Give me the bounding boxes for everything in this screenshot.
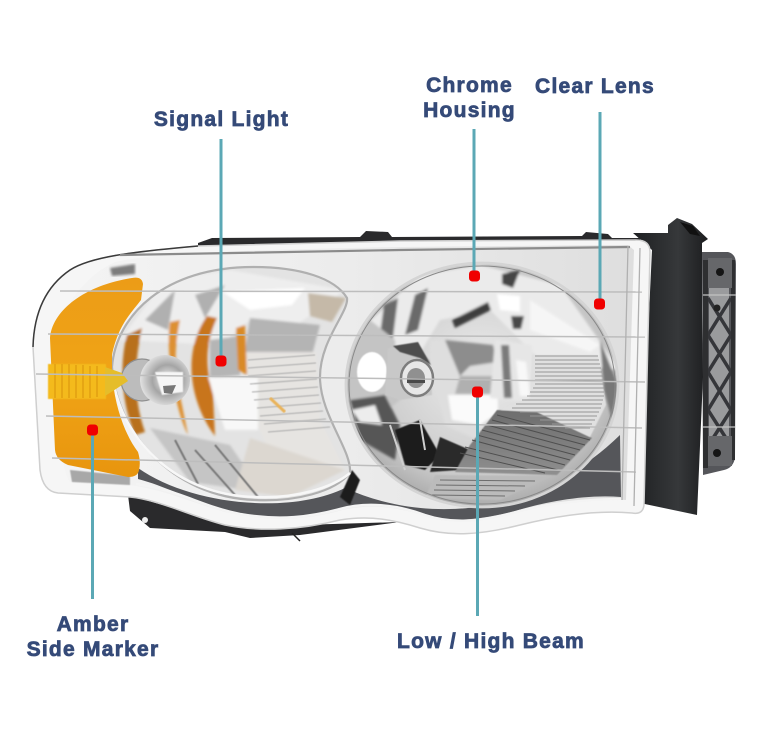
label: amber side marker: Amber xyxy=(57,613,129,636)
amber side marker xyxy=(48,278,143,477)
headlight assembly photo xyxy=(33,218,736,541)
marker: signal light xyxy=(216,356,226,366)
callout: clear lens xyxy=(535,75,655,310)
leader line: chrome housing xyxy=(472,129,476,276)
low and high beam reflector xyxy=(346,263,620,507)
chrome housing background xyxy=(55,245,634,521)
lens ribs xyxy=(36,291,645,472)
marker: clear lens xyxy=(594,298,605,310)
label: clear lens: Clear Lens xyxy=(535,75,655,98)
callout: amber side marker xyxy=(27,424,159,661)
marker: amber side marker xyxy=(87,424,98,436)
signal bulb xyxy=(121,355,190,405)
bulb cap xyxy=(385,342,433,400)
leader line: signal light xyxy=(220,139,222,361)
callout: chrome housing xyxy=(423,74,516,282)
leader line: low and high beam xyxy=(476,392,479,616)
label: amber side marker: Side Marker xyxy=(27,638,159,661)
callout: low and high beam xyxy=(397,386,585,653)
label: signal light: Signal Light xyxy=(154,108,289,131)
top and bottom clips xyxy=(128,231,640,541)
marker: chrome housing xyxy=(469,270,480,282)
dark lower housing xyxy=(138,435,621,520)
label: chrome housing: Chrome xyxy=(426,74,513,97)
leader line: amber side marker xyxy=(91,430,94,599)
bright bulb aperture xyxy=(357,352,387,392)
clear lens outer shell xyxy=(33,240,650,534)
signal light reflector xyxy=(112,267,350,500)
label: chrome housing: Housing xyxy=(423,99,516,122)
marker: low and high beam xyxy=(472,386,483,398)
lens right edge xyxy=(622,246,640,506)
black shroud xyxy=(633,218,708,515)
label: low and high beam: Low / High Beam xyxy=(397,630,585,653)
rear mounting bracket xyxy=(702,252,736,475)
callout: signal light xyxy=(154,108,289,366)
leader line: clear lens xyxy=(598,112,602,304)
